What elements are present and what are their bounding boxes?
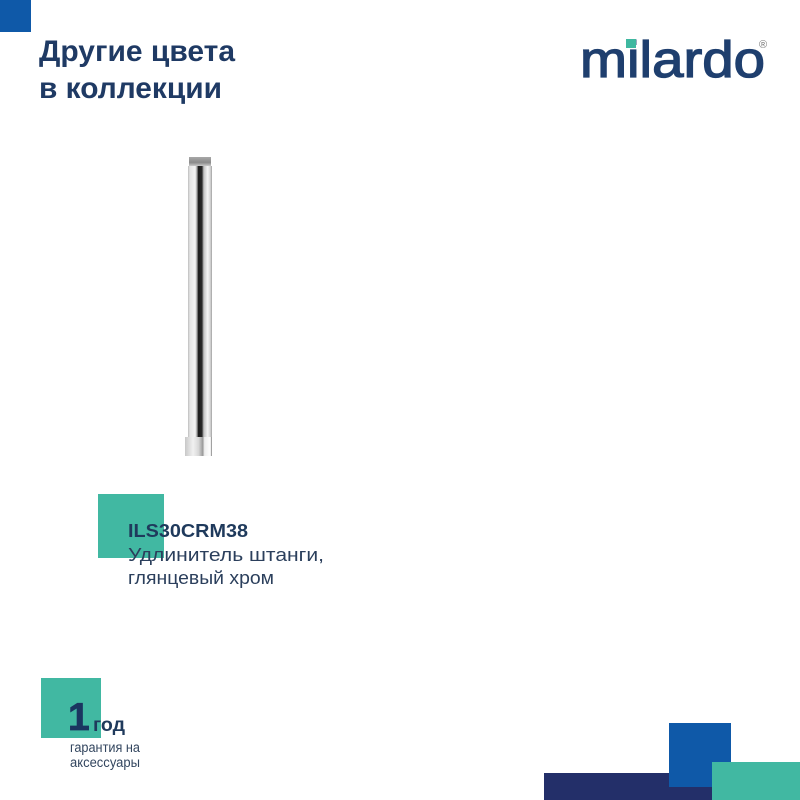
corner accent square (0, 0, 31, 32)
logo dot (626, 39, 636, 48)
product teal square (98, 494, 164, 558)
title: в коллекции (39, 72, 222, 105)
warranty number: 1 (68, 696, 90, 739)
product name: глянцевый хром (128, 567, 274, 588)
warranty block (68, 696, 140, 770)
product code: ILS30CRM38 (128, 521, 248, 541)
title: Другие цвета (39, 35, 235, 68)
decorative corner blocks (544, 723, 800, 800)
warranty teal square (41, 678, 101, 738)
title (39, 35, 235, 105)
warranty text: гарантия на (70, 740, 140, 755)
product image: chrome extension rod (185, 157, 212, 456)
warranty text (70, 740, 140, 770)
warranty unit: год (93, 715, 125, 736)
product name: Удлинитель штанги, (128, 544, 324, 565)
product name (128, 544, 324, 588)
registered mark: ® (759, 39, 767, 51)
logo: milardo: milardo (580, 31, 765, 88)
warranty text: аксессуары (70, 755, 140, 770)
product description (128, 521, 324, 588)
